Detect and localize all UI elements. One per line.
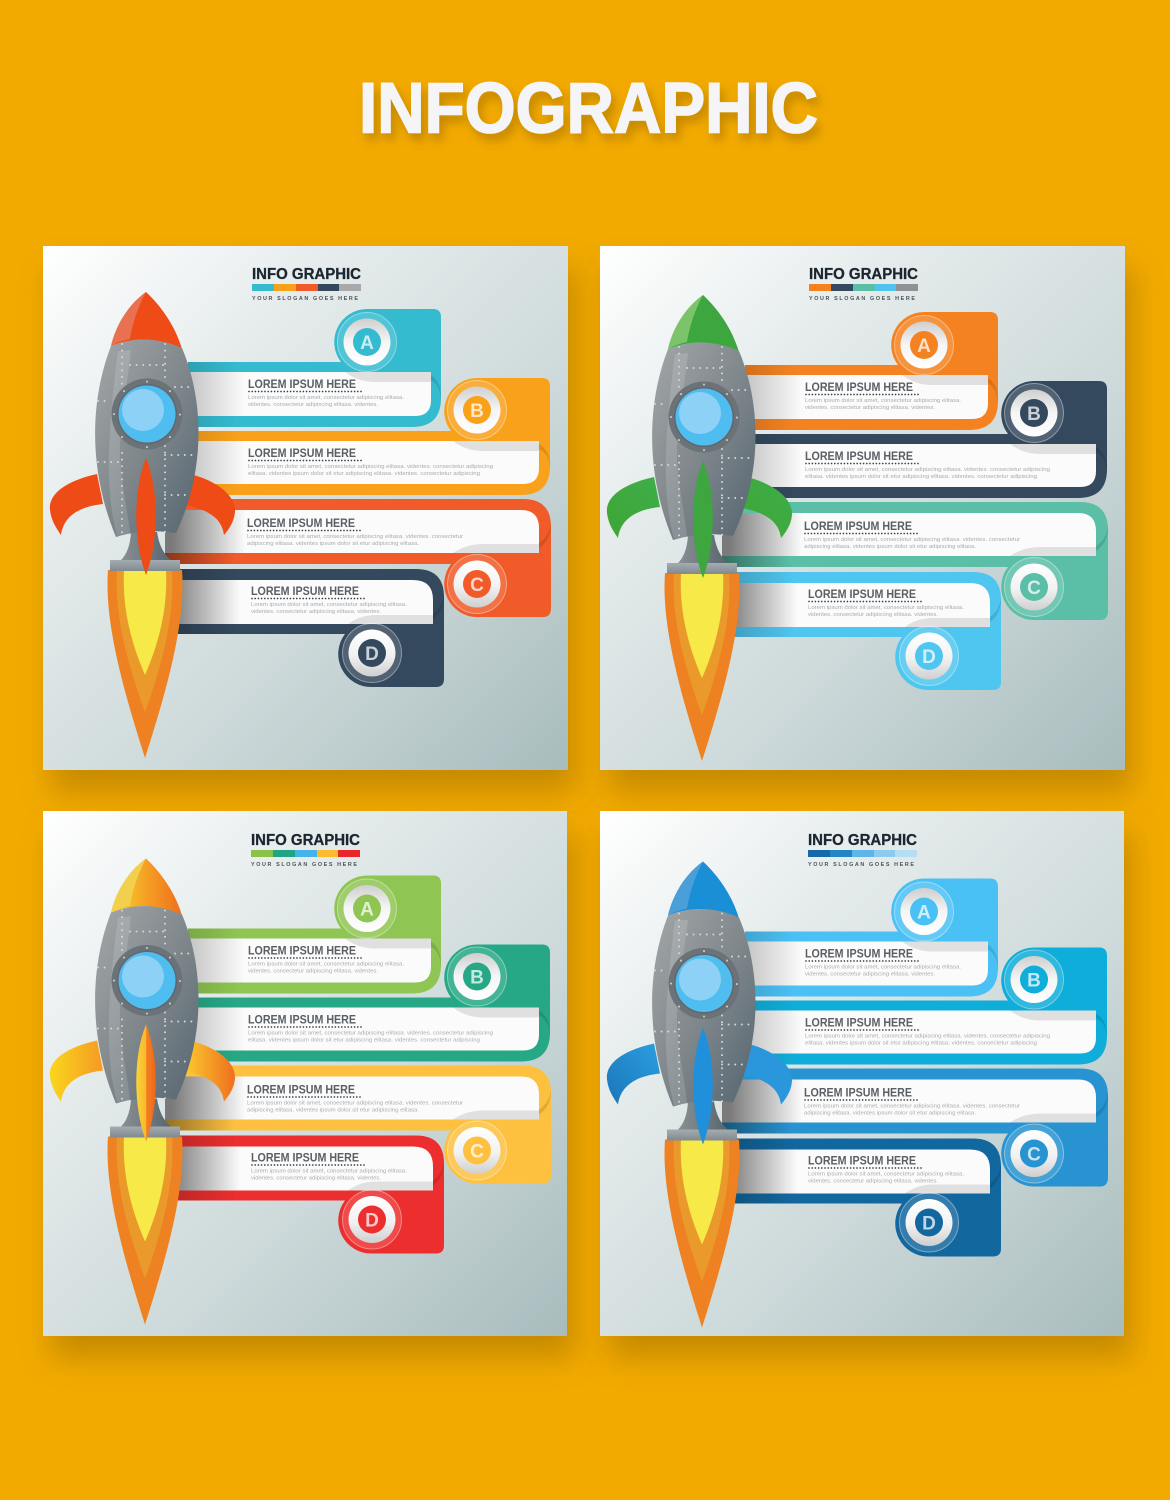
option A card: LOREM IPSUM HERE [805, 946, 913, 960]
option A card: A [360, 333, 374, 354]
option D card: LOREM IPSUM HERE [251, 584, 359, 598]
panel heading: INFO GRAPHIC [252, 266, 361, 283]
option D card: D [922, 647, 936, 668]
panel heading: INFO GRAPHIC [808, 832, 917, 849]
option D card: Lorem ipsum dolor sit amet, consectetur adipiscing elitasa. [251, 1168, 407, 1174]
panel heading: INFO GRAPHIC [251, 832, 360, 849]
option D card: LOREM IPSUM HERE [808, 587, 916, 601]
option B card: elitasa. videntes ipsum dolor sit etur adipiscing elitasa. videntes. consectetur adipiscing [248, 471, 480, 477]
option D card: videntes. consectetur adipiscing elitasa. videntes. [808, 1178, 938, 1184]
option B card: LOREM IPSUM HERE [248, 1012, 356, 1026]
option B card: LOREM IPSUM HERE [805, 449, 913, 463]
option D card: D [365, 1210, 379, 1232]
panel: blue rocket infographic [600, 811, 1124, 1336]
option B card: Lorem ipsum dolor sit amet, consectetur adipiscing elitasa. videntes. consectetur adipiscing [248, 1030, 493, 1036]
option C card: adipiscing elitasa. videntes ipsum dolor sit etur adipiscing elitasa. [804, 544, 976, 550]
option A card: Lorem ipsum dolor sit amet, consectetur adipiscing elitasa. [805, 964, 961, 970]
option D card [178, 1136, 444, 1254]
option B card: LOREM IPSUM HERE [805, 1016, 913, 1030]
panel content group [607, 295, 1108, 761]
option B card [188, 944, 550, 1062]
option C card: LOREM IPSUM HERE [247, 1082, 355, 1096]
option A card [188, 876, 441, 994]
option C card [722, 502, 1108, 620]
option C card: adipiscing elitasa. videntes ipsum dolor sit etur adipiscing elitasa. [247, 1108, 419, 1114]
option B card [188, 378, 550, 495]
option A card: A [360, 900, 374, 920]
option C card [722, 1068, 1108, 1186]
option D card [735, 572, 1001, 690]
panel heading: YOUR SLOGAN GOES HERE [808, 862, 914, 868]
option A card: A [917, 902, 931, 924]
option B card [745, 948, 1107, 1064]
panel content group [50, 858, 551, 1324]
option A card: LOREM IPSUM HERE [805, 380, 913, 394]
option A card: Lorem ipsum dolor sit amet, consectetur adipiscing elitasa. [248, 962, 404, 968]
option B card [745, 381, 1107, 498]
option A card [745, 878, 998, 996]
option C card: Lorem ipsum dolor sit amet, consectetur adipiscing elitasa. videntes. consectetur [804, 537, 1020, 543]
option A card: A [917, 336, 931, 357]
icon: yellow rocket [50, 858, 235, 1324]
panel heading [251, 832, 360, 868]
option C card [165, 499, 551, 617]
option B card: Lorem ipsum dolor sit amet, consectetur adipiscing elitasa. videntes. consectetur adipiscing [805, 467, 1050, 473]
option B card: Lorem ipsum dolor sit amet, consectetur adipiscing elitasa. videntes. consectetur adipiscing [248, 464, 493, 470]
option D card: videntes. consectetur adipiscing elitasa. videntes. [251, 1176, 381, 1182]
option A card: videntes. consectetur adipiscing elitasa. videntes. [248, 968, 378, 974]
option D card: Lorem ipsum dolor sit amet, consectetur adipiscing elitasa. [251, 602, 407, 608]
panel: yellow rocket infographic [43, 811, 567, 1336]
option D card: videntes. consectetur adipiscing elitasa. videntes. [251, 609, 381, 615]
option C card: C [470, 1142, 484, 1162]
panel heading: YOUR SLOGAN GOES HERE [252, 296, 358, 302]
option B card: B [1027, 970, 1041, 992]
icon: blue rocket [607, 862, 792, 1328]
option D card [735, 1138, 1001, 1257]
option A card [188, 309, 441, 427]
option C card: C [470, 575, 484, 596]
option C card: Lorem ipsum dolor sit amet, consectetur adipiscing elitasa. videntes. consectetur [804, 1104, 1020, 1110]
panel heading: YOUR SLOGAN GOES HERE [809, 296, 915, 302]
option B card: B [1027, 404, 1041, 425]
option C card: C [1027, 1144, 1041, 1166]
option A card: videntes. consectetur adipiscing elitasa. videntes. [248, 402, 378, 408]
option A card: Lorem ipsum dolor sit amet, consectetur adipiscing elitasa. [248, 395, 404, 401]
panel: red rocket infographic [43, 246, 568, 770]
option C card: LOREM IPSUM HERE [804, 1086, 912, 1100]
option D card: LOREM IPSUM HERE [251, 1150, 359, 1164]
option B card: B [470, 401, 484, 422]
panel heading [809, 266, 918, 302]
panel: green rocket infographic [600, 246, 1125, 770]
option D card: D [365, 644, 379, 665]
option A card: videntes. consectetur adipiscing elitasa. videntes. [805, 972, 935, 978]
panel heading: YOUR SLOGAN GOES HERE [251, 862, 357, 868]
option C card: adipiscing elitasa. videntes ipsum dolor sit etur adipiscing elitasa. [804, 1110, 976, 1116]
option C card: Lorem ipsum dolor sit amet, consectetur adipiscing elitasa. videntes. consectetur [247, 1100, 463, 1106]
option A card: videntes. consectetur adipiscing elitasa. videntes. [805, 405, 935, 411]
option C card: Lorem ipsum dolor sit amet, consectetur adipiscing elitasa. videntes. consectetur [247, 534, 463, 540]
option C card: LOREM IPSUM HERE [247, 516, 355, 530]
option A card [745, 312, 998, 430]
option D card: videntes. consectetur adipiscing elitasa. videntes. [808, 612, 938, 618]
option D card: D [922, 1214, 936, 1234]
panel heading [252, 266, 361, 302]
option D card: LOREM IPSUM HERE [808, 1154, 916, 1168]
option C card: LOREM IPSUM HERE [804, 519, 912, 533]
title: INFOGRAPHIC [359, 70, 818, 148]
option A card: LOREM IPSUM HERE [248, 377, 356, 391]
option A card: Lorem ipsum dolor sit amet, consectetur adipiscing elitasa. [805, 398, 961, 404]
panel heading: INFO GRAPHIC [809, 266, 918, 283]
option B card: elitasa. videntes ipsum dolor sit etur adipiscing elitasa. videntes. consectetur adipiscing [805, 474, 1037, 480]
option B card: Lorem ipsum dolor sit amet, consectetur adipiscing elitasa. videntes. consectetur adipiscing [805, 1034, 1050, 1040]
option D card: Lorem ipsum dolor sit amet, consectetur adipiscing elitasa. [808, 605, 964, 611]
option B card: elitasa. videntes ipsum dolor sit etur adipiscing elitasa. videntes. consectetur adipiscing [805, 1040, 1037, 1046]
option B card: LOREM IPSUM HERE [248, 446, 356, 460]
option B card: elitasa. videntes ipsum dolor sit etur adipiscing elitasa. videntes. consectetur adipiscing [248, 1038, 480, 1044]
option D card [178, 569, 444, 687]
icon: green rocket [607, 295, 792, 761]
option D card: Lorem ipsum dolor sit amet, consectetur adipiscing elitasa. [808, 1172, 964, 1178]
panel heading [808, 832, 917, 868]
icon: red rocket [50, 292, 235, 758]
option C card: C [1027, 578, 1041, 599]
option B card: B [470, 968, 484, 988]
option A card: LOREM IPSUM HERE [248, 944, 356, 958]
panel content group [607, 862, 1108, 1328]
option C card [165, 1066, 551, 1184]
option C card: adipiscing elitasa. videntes ipsum dolor sit etur adipiscing elitasa. [247, 541, 419, 547]
